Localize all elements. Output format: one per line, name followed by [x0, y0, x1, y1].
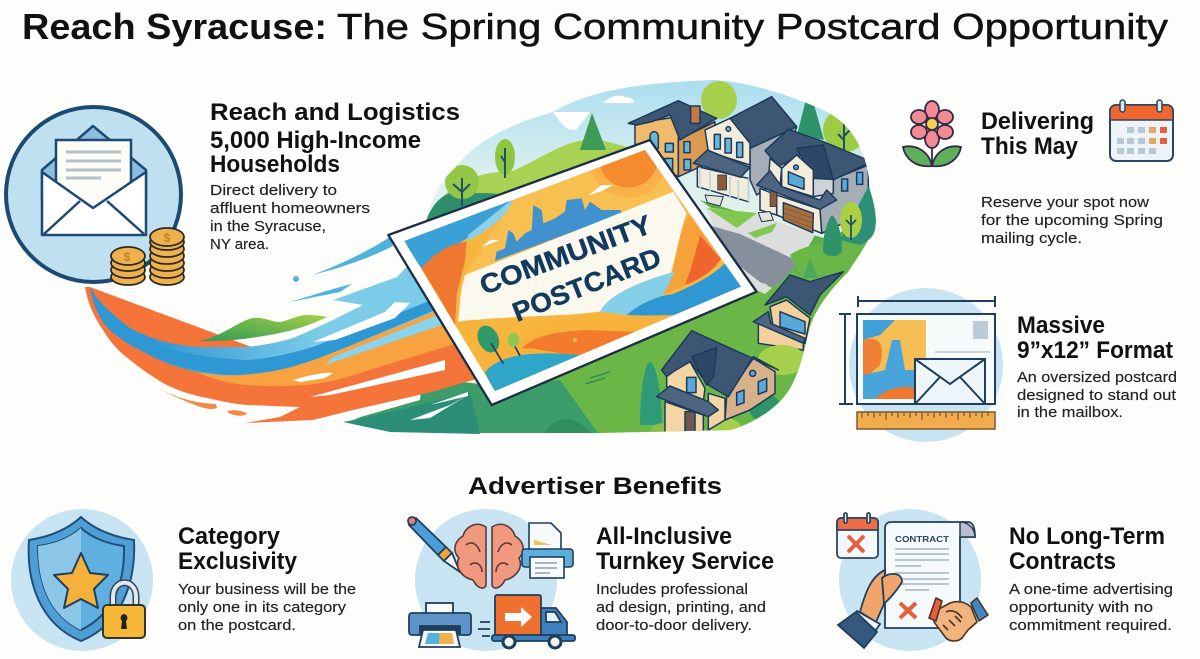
title: The Spring Community Postcard Opportunity: [337, 6, 1168, 47]
icon: contract and handshake: [837, 509, 988, 651]
illustration: flying swoosh trail: [85, 215, 500, 434]
text block: no long-term contracts: commitment required.: [1009, 618, 1172, 634]
text block: reach and logistics: [210, 99, 460, 253]
house: tan: [628, 101, 717, 177]
icon: large printer: [409, 603, 471, 647]
card headline: [476, 209, 665, 328]
icon: envelope and coins: $: [124, 250, 131, 264]
text block: reach and logistics: in the Syracuse,: [210, 219, 326, 235]
house: white with porch: [693, 97, 797, 206]
text block: no long-term contracts: [1009, 523, 1173, 634]
bushes lower right: [640, 345, 806, 438]
text block: category exclusivity: Your business will be the: [178, 582, 356, 598]
text block: turnkey service: All-Inclusive: [596, 523, 732, 550]
text block: category exclusivity: Exclusivity: [178, 548, 298, 575]
text block: massive format: [1017, 312, 1177, 421]
text block: massive format: An oversized postcard: [1017, 370, 1177, 386]
text block: category exclusivity: on the postcard.: [178, 618, 296, 634]
text block: reach and logistics: Reach and Logistics: [210, 99, 460, 126]
text block: reach and logistics: NY area.: [210, 237, 269, 253]
text block: turnkey service: Turnkey Service: [596, 548, 774, 575]
text block: no long-term contracts: No Long-Term: [1009, 523, 1165, 550]
text block: delivering this may: Reserve your spot now: [981, 195, 1150, 211]
text block: massive format: designed to stand out: [1017, 388, 1176, 404]
white text band: [458, 192, 687, 322]
icon: contract sheet: [885, 522, 975, 628]
text block: category exclusivity: Category: [178, 523, 281, 550]
text block: delivering this may: Delivering: [981, 108, 1094, 135]
icon: cancelled calendar: [837, 513, 878, 558]
text block: reach and logistics: Direct delivery to: [210, 183, 337, 199]
text block: turnkey service: [596, 523, 774, 634]
icon: shield and lock: [11, 509, 153, 651]
postcard trees: [473, 322, 520, 364]
cloud: [553, 96, 634, 130]
icon: envelope and coins: [6, 107, 184, 285]
icon: flower: [903, 101, 961, 166]
text block: turnkey service: ad design, printing, and: [596, 600, 766, 616]
house: with garage: [757, 129, 872, 233]
icon: handshake: [929, 598, 988, 641]
grass: [551, 208, 876, 433]
icon: truck: [492, 595, 575, 648]
text block: turnkey service: door-to-door delivery.: [596, 618, 752, 634]
icon: 9x12 postcard format: [839, 288, 1003, 442]
illustration: community postcard: [385, 119, 760, 410]
text block: category exclusivity: [178, 523, 356, 634]
text block: delivering this may: This May: [981, 133, 1079, 160]
postcard skyline: [495, 198, 622, 261]
icon: small printer: [522, 523, 573, 578]
icon: calendar: [1110, 100, 1173, 161]
text block: no long-term contracts: A one-time advertising: [1009, 582, 1173, 598]
background hills: [443, 140, 628, 196]
text block: massive format: in the mailbox.: [1017, 405, 1123, 421]
card headline: COMMUNITY: [476, 209, 656, 301]
icon: contract sheet: CONTRACT: [895, 534, 950, 544]
text block: reach and logistics: 5,000 High-Income: [210, 127, 421, 154]
illustration: neighborhood scene: [340, 75, 885, 438]
tree group lower right: [790, 187, 880, 278]
title: [22, 6, 1168, 47]
text block: reach and logistics: Households: [210, 151, 340, 178]
road and sidewalk: [706, 207, 815, 262]
conifer: [580, 113, 606, 150]
card headline: POSTCARD: [508, 242, 665, 328]
icon: pen: [408, 517, 460, 572]
text block: no long-term contracts: opportunity with no: [1009, 600, 1153, 616]
text block: no long-term contracts: Contracts: [1009, 548, 1116, 575]
house: right middle: [753, 272, 843, 350]
house: bottom: [657, 331, 778, 435]
text block: delivering this may: mailing cycle.: [981, 231, 1082, 247]
text block: reach and logistics: affluent homeowners: [210, 201, 370, 217]
text block: category exclusivity: only one in its category: [178, 600, 347, 616]
icon: design, print and delivery: [408, 509, 575, 651]
icon: hand holding contract: [838, 570, 902, 648]
text block: turnkey service: Includes professional: [596, 582, 748, 598]
title: Reach Syracuse:: [22, 6, 327, 47]
heading: advertiser benefits: Advertiser Benefits: [468, 473, 722, 500]
text block: delivering this may: [981, 108, 1163, 247]
icon: brain: [455, 524, 523, 588]
icon: envelope and coins: $: [164, 231, 171, 245]
text block: massive format: Massive: [1017, 312, 1105, 339]
green hill: [200, 315, 327, 341]
trees: [445, 81, 867, 206]
text block: delivering this may: for the upcoming Spring: [981, 213, 1163, 229]
text block: massive format: 9”x12” Format: [1017, 337, 1173, 364]
